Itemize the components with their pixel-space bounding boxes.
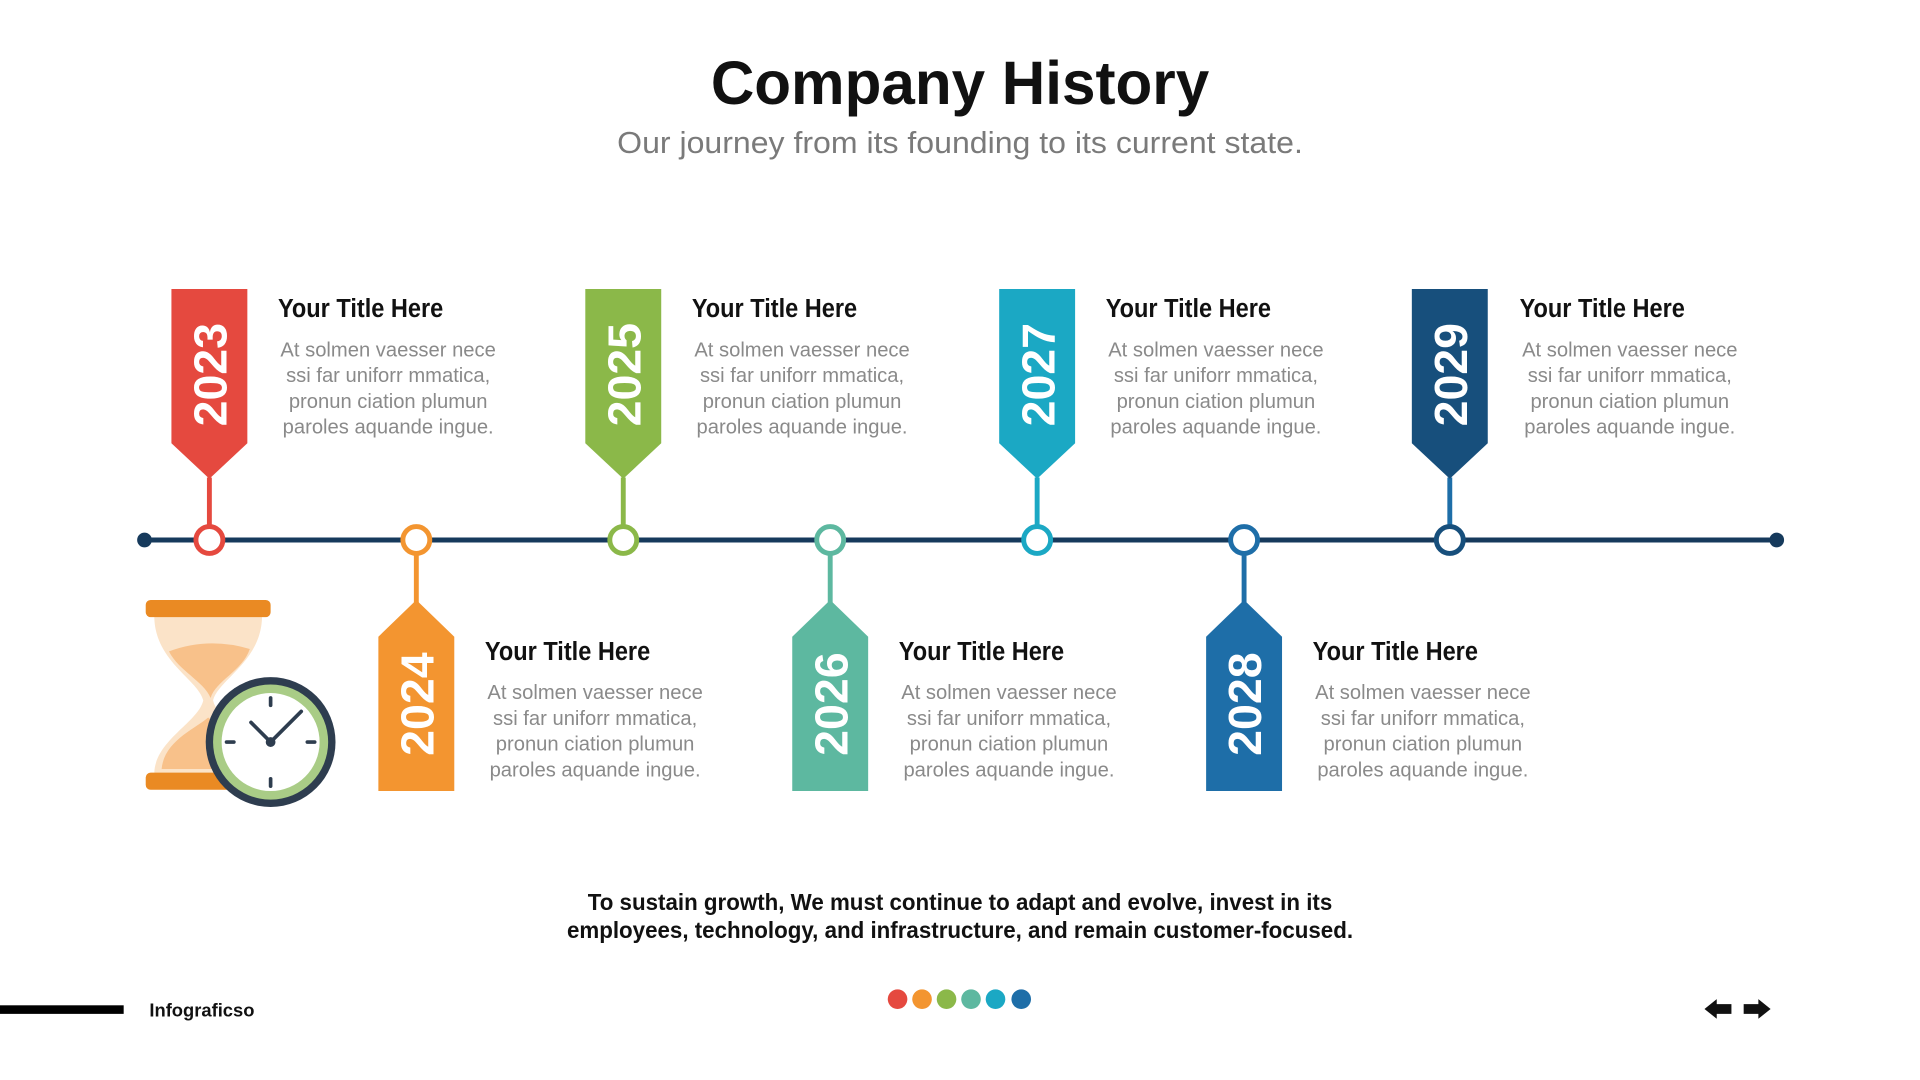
milestone 2026: paroles aquande ingue. bbox=[903, 759, 1114, 781]
milestone 2026: Your Title Here bbox=[899, 638, 1064, 666]
milestone 2029: 2029 bbox=[1425, 323, 1477, 426]
milestone 2028 bbox=[1206, 527, 1531, 791]
nav arrows bbox=[1704, 999, 1771, 1019]
milestone 2024: ssi far uniforr mmatica, bbox=[493, 708, 697, 730]
milestone 2026: pronun ciation plumun bbox=[910, 734, 1108, 756]
milestone 2025: ssi far uniforr mmatica, bbox=[700, 365, 904, 387]
milestone 2027: 2027 bbox=[1012, 323, 1064, 426]
milestone 2023: paroles aquande ingue. bbox=[283, 416, 494, 438]
milestone 2028: Your Title Here bbox=[1313, 638, 1478, 666]
milestone 2026: 2026 bbox=[805, 652, 857, 756]
milestone 2025 bbox=[585, 289, 910, 553]
milestone 2029: pronun ciation plumun bbox=[1530, 391, 1729, 413]
title: Company History bbox=[711, 49, 1209, 117]
milestone 2026: At solmen vaesser nece bbox=[901, 682, 1117, 704]
closing statement bbox=[567, 889, 1353, 943]
milestone 2029: At solmen vaesser nece bbox=[1522, 339, 1738, 361]
footer brand bbox=[0, 999, 254, 1020]
milestone 2025: At solmen vaesser nece bbox=[694, 339, 910, 361]
milestone 2023: At solmen vaesser nece bbox=[280, 339, 496, 361]
milestone 2028: 2028 bbox=[1219, 652, 1271, 756]
milestone 2028: pronun ciation plumun bbox=[1324, 734, 1522, 756]
milestone 2027 bbox=[999, 289, 1324, 553]
milestone 2025: 2025 bbox=[598, 323, 650, 426]
closing statement: To sustain growth, We must continue to adapt and evolve, invest in its bbox=[588, 889, 1332, 915]
milestone 2029 bbox=[1412, 289, 1738, 553]
milestone 2023 bbox=[171, 289, 496, 553]
milestone 2024: Your Title Here bbox=[485, 638, 650, 666]
milestone 2025: Your Title Here bbox=[692, 295, 857, 323]
closing statement: employees, technology, and infrastructure, and remain customer-focused. bbox=[567, 917, 1353, 943]
milestone 2029: ssi far uniforr mmatica, bbox=[1528, 365, 1732, 387]
footer brand: Infograficso bbox=[149, 999, 254, 1020]
milestone 2024: paroles aquande ingue. bbox=[490, 759, 701, 781]
milestone 2027: paroles aquande ingue. bbox=[1110, 416, 1321, 438]
subtitle: Our journey from its founding to its current state. bbox=[617, 126, 1303, 160]
milestone 2024: pronun ciation plumun bbox=[496, 734, 694, 756]
milestone 2029: Your Title Here bbox=[1520, 295, 1685, 323]
milestone 2024: 2024 bbox=[391, 652, 443, 756]
milestone 2028: paroles aquande ingue. bbox=[1317, 759, 1528, 781]
milestone 2027: ssi far uniforr mmatica, bbox=[1114, 365, 1318, 387]
milestone 2024: At solmen vaesser nece bbox=[487, 682, 703, 704]
milestone 2023: 2023 bbox=[185, 323, 237, 426]
milestone 2027: At solmen vaesser nece bbox=[1108, 339, 1324, 361]
milestone 2026 bbox=[792, 527, 1117, 791]
milestone 2023: Your Title Here bbox=[278, 295, 443, 323]
timeline line bbox=[137, 533, 1784, 547]
milestone 2028: At solmen vaesser nece bbox=[1315, 682, 1531, 704]
color dots bbox=[888, 989, 1031, 1009]
icon: hourglass and clock bbox=[146, 600, 336, 807]
milestone 2028: ssi far uniforr mmatica, bbox=[1321, 708, 1525, 730]
milestone 2024 bbox=[378, 527, 703, 791]
milestone 2023: pronun ciation plumun bbox=[289, 391, 487, 413]
milestone 2027: pronun ciation plumun bbox=[1117, 391, 1315, 413]
milestone 2025: pronun ciation plumun bbox=[703, 391, 901, 413]
milestone 2025: paroles aquande ingue. bbox=[697, 416, 908, 438]
milestone 2023: ssi far uniforr mmatica, bbox=[286, 365, 490, 387]
milestone 2027: Your Title Here bbox=[1106, 295, 1271, 323]
milestone 2026: ssi far uniforr mmatica, bbox=[907, 708, 1111, 730]
milestone 2029: paroles aquande ingue. bbox=[1524, 416, 1735, 438]
